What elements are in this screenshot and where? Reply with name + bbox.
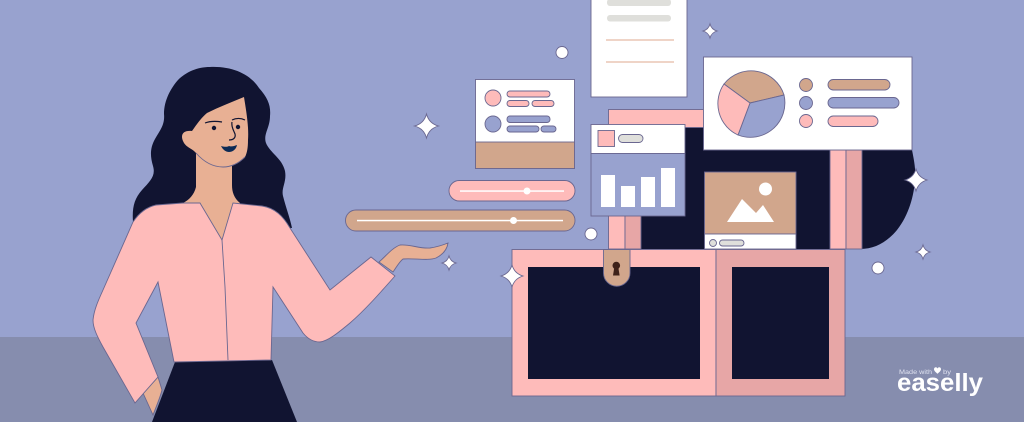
eyes and eyebrows [205,118,245,130]
card: image placeholder [704,172,796,249]
card: pie chart with legend [704,57,912,150]
neck [183,153,240,245]
sparkles [414,24,930,287]
card: bar chart [591,124,685,216]
chest lid [608,110,915,249]
watermark: easelly logo [897,367,983,397]
legend [800,78,899,128]
right hand [379,243,448,272]
pie chart [718,71,785,137]
hair [133,67,292,228]
skirt [152,360,297,422]
by label: by [943,369,952,376]
floor [0,337,1024,422]
slider: brown [346,210,575,231]
left hand on hip [143,377,162,415]
woman figure [93,67,448,422]
background wall [0,0,1024,337]
card: profile list [476,80,574,168]
heart icon [934,367,941,374]
blouse placket [222,240,228,360]
face [182,97,248,167]
chest lock [604,250,630,286]
mouth [221,145,237,152]
easelly wordmark: easelly [897,369,983,397]
nose [229,122,235,140]
decorative dots [556,46,884,274]
jaw line [196,153,245,167]
slider: pink [449,180,575,201]
chest body [512,250,845,396]
document sheet [591,0,687,97]
made with label: Made with [899,369,932,376]
blouse [93,203,395,403]
